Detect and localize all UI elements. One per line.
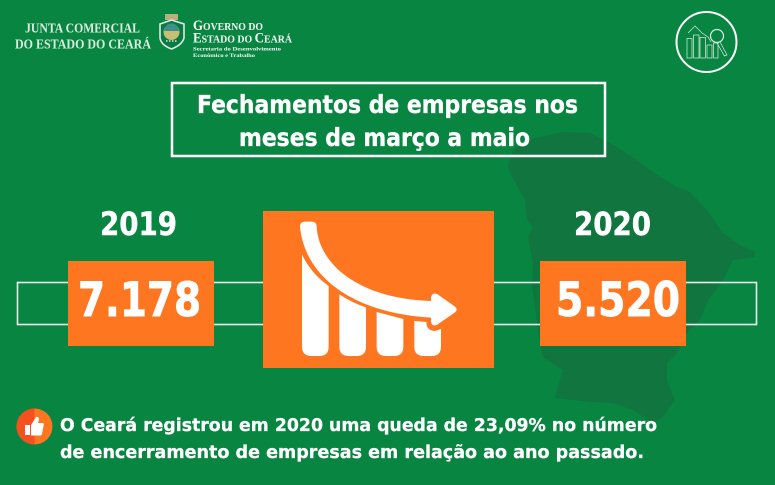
header: Governo do Estado do Ceará logo text: Secretaria do Desenvolvimento bbox=[193, 46, 281, 52]
header: Junta Comercial logo text bbox=[15, 20, 151, 52]
year label 2020: 2020 bbox=[574, 205, 651, 243]
icon: declining bars and arrow bbox=[300, 222, 457, 356]
icon: chart with magnifying glass in circle bbox=[676, 12, 736, 72]
value box 2019 bbox=[68, 261, 214, 346]
central orange panel with declining chart icon bbox=[263, 211, 494, 368]
summary text: de encerramento de empresas em relação ao ano passado. bbox=[60, 442, 644, 463]
year label 2019: 2019 bbox=[100, 205, 177, 243]
map of Ceará silhouette bbox=[508, 132, 755, 423]
value box 2020: 5.520 bbox=[556, 273, 680, 328]
title text: meses de março a maio bbox=[239, 123, 530, 152]
title box bbox=[172, 83, 605, 156]
header: Governo do Estado do Ceará logo text: GOVERNO DO bbox=[193, 18, 263, 34]
value box 2019: 7.178 bbox=[78, 273, 201, 328]
summary text: O Ceará registrou em 2020 uma queda de 23,09% no número bbox=[60, 415, 657, 436]
header: Governo do Estado do Ceará logo text: Econômico e Trabalho bbox=[193, 53, 255, 59]
header: Junta Comercial logo text: DO ESTADO DO CEARÁ bbox=[15, 36, 151, 52]
header: Junta Comercial logo text: JUNTA COMERCIAL bbox=[25, 20, 140, 36]
value box 2020 bbox=[540, 261, 686, 346]
icon: thumbs up badge bbox=[16, 408, 52, 444]
icon: Ceará state crest bbox=[160, 14, 184, 49]
title text bbox=[197, 90, 578, 152]
header: Governo do Estado do Ceará logo text bbox=[193, 18, 292, 59]
title text: Fechamentos de empresas nos bbox=[197, 90, 578, 119]
summary text bbox=[60, 415, 657, 463]
header: Governo do Estado do Ceará logo text: ESTADO DO CEARÁ bbox=[193, 30, 292, 46]
horizontal outlined band bbox=[18, 282, 756, 324]
